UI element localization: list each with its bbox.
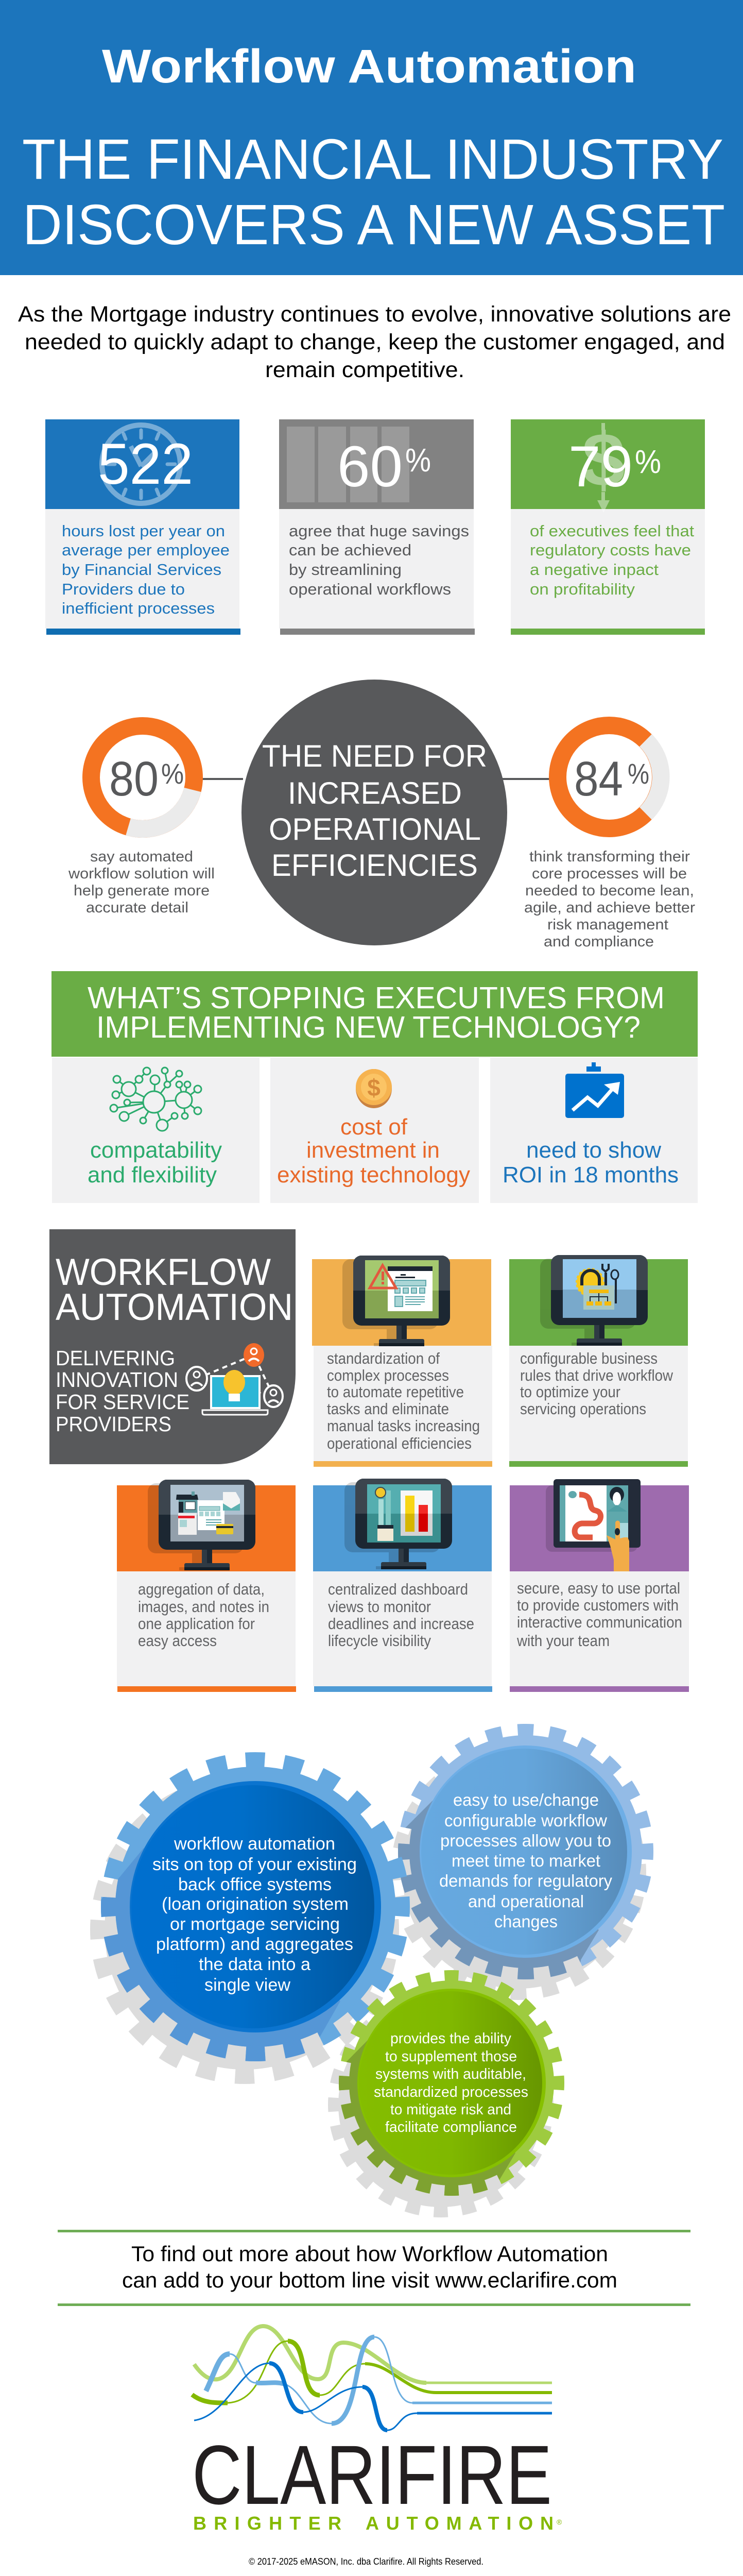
caption: 84%: needed to become lean, (525, 883, 694, 899)
subheading (56, 1346, 189, 1436)
donut chart: 84%: 84 (574, 752, 623, 806)
card: configurable business rules (509, 1255, 688, 1467)
description (328, 1580, 474, 1650)
gear: supplement with auditable processes (334, 1976, 559, 2212)
stat card: 60% (279, 419, 475, 635)
header banner (0, 0, 743, 275)
text: demands for regulatory (439, 1871, 612, 1890)
description (520, 1349, 673, 1418)
donut chart: 84%: % (628, 757, 649, 790)
donut chart: 84% (558, 725, 661, 828)
caption: 80%: help generate more (74, 883, 210, 899)
icon: tablet with touching hand (546, 1479, 641, 1571)
description: agree that huge savings (289, 522, 469, 540)
intro paragraph: remain competitive. (265, 358, 464, 382)
label: need to show (526, 1138, 661, 1163)
description: images, and notes in (138, 1598, 269, 1616)
text: the data into a (199, 1955, 310, 1974)
label (277, 1114, 470, 1188)
intro paragraph (18, 302, 731, 382)
caption: 84% (524, 849, 695, 950)
centre circle: the need for increased operational efficiencies: THE NEED FOR (262, 739, 487, 773)
stat card: 79% (511, 418, 705, 635)
caption: 80%: say automated (90, 849, 193, 865)
text: provides the ability (390, 2030, 511, 2047)
text: facilitate compliance (385, 2119, 517, 2136)
centre circle: the need for increased operational efficiencies: EFFICIENCIES (271, 848, 478, 883)
subheading: DELIVERING (56, 1346, 175, 1370)
description: interactive communication (517, 1613, 682, 1631)
logo: tagline: ® (557, 2518, 562, 2526)
description (516, 1579, 682, 1650)
text: configurable workflow (444, 1811, 607, 1830)
caption: 80%: workflow solution will (68, 866, 215, 882)
icon: monitor with tools and org chart (540, 1255, 648, 1346)
description: deadlines and increase (328, 1615, 474, 1633)
subtitle: DISCOVERS A NEW ASSET (23, 193, 725, 257)
copyright: © 2017-2025 eMASON, Inc. dba Clarifire. All Rights Reserved. (249, 2556, 483, 2567)
green banner heading: IMPLEMENTING NEW TECHNOLOGY? (96, 1010, 641, 1044)
description: to automate repetitive (327, 1383, 464, 1401)
card: aggregation of data (117, 1480, 296, 1692)
description: secure, easy to use portal (517, 1579, 680, 1597)
heading (56, 1251, 293, 1328)
description: on profitability (530, 580, 635, 598)
panel: need to show ROI (490, 1058, 698, 1203)
label: existing technology (277, 1162, 470, 1188)
number (568, 434, 661, 499)
text: standardized processes (374, 2084, 528, 2100)
label: investment in (306, 1138, 440, 1163)
description: by Financial Services (62, 561, 221, 579)
caption: 84%: risk management (547, 917, 668, 933)
subheading: PROVIDERS (56, 1412, 171, 1436)
icon: monitor with warning and document (342, 1256, 450, 1346)
subheading: FOR SERVICE (56, 1390, 189, 1414)
text: and operational (468, 1892, 584, 1911)
description: operational workflows (289, 580, 451, 598)
icon: monitor with dashboard (344, 1479, 452, 1569)
description: with your team (516, 1632, 610, 1650)
description: inefficient processes (62, 599, 215, 617)
subheading: INNOVATION (56, 1368, 178, 1392)
icon: columns (287, 427, 409, 502)
icon: coin: $ (367, 1074, 381, 1101)
description: a negative inpact (530, 561, 659, 579)
card: standardization (312, 1256, 492, 1467)
number: % (405, 442, 431, 479)
label: and flexibility (88, 1162, 217, 1188)
icon: laptop with bulb and people (186, 1343, 283, 1415)
text: workflow automation (174, 1834, 335, 1854)
icon: clock (102, 425, 180, 503)
description: one application for (138, 1615, 255, 1633)
intro paragraph: needed to quickly adapt to change, keep the customer engaged, and (25, 330, 725, 354)
connectors between donuts and centre circle (202, 778, 550, 780)
number: 79 (568, 434, 633, 499)
text: or mortgage servicing (170, 1914, 340, 1934)
centre circle: the need for increased operational efficiencies: INCREASED (288, 776, 462, 810)
text: single view (204, 1975, 290, 1995)
number: 60 (337, 434, 403, 499)
icon: monitor with documents (148, 1480, 255, 1570)
heading: WORKFLOW (56, 1251, 271, 1293)
logo: clarifire waves (192, 2326, 552, 2430)
number (337, 434, 431, 499)
description: standardization of (327, 1349, 440, 1367)
card: centralized dashboard (313, 1479, 492, 1692)
panel: workflow automation delivering innovation (49, 1229, 296, 1464)
caption: 84%: think transforming their (529, 849, 690, 865)
text: sits on top of your existing (152, 1855, 357, 1874)
caption: 80%: accurate detail (86, 900, 188, 916)
stat card: 522 hours (45, 419, 240, 635)
caption: 84%: core processes will be (532, 866, 687, 882)
label (503, 1138, 679, 1188)
icon: clipboard with rising arrow (565, 1062, 624, 1118)
description (327, 1349, 480, 1452)
subtitle: THE FINANCIAL INDUSTRY (22, 128, 723, 191)
text: (loan origination system (162, 1894, 349, 1914)
description: Providers due to (62, 580, 185, 598)
donut chart: 80%: % (161, 757, 184, 790)
text: changes (494, 1912, 558, 1931)
caption: 84%: and compliance (544, 934, 654, 950)
title: Workflow Automation (102, 40, 636, 93)
icon: dollar with falling arrow: $ (582, 418, 625, 502)
label: compatability (90, 1138, 222, 1163)
heading: AUTOMATION (56, 1286, 293, 1328)
subtitle (22, 128, 725, 257)
call to action: can add to your bottom line visit www.eclarifire.com (122, 2268, 617, 2292)
donut chart: 80%: 80 (109, 752, 159, 806)
caption: 84%: agile, and achieve better (524, 900, 695, 916)
description: aggregation of data, (138, 1580, 265, 1598)
description: servicing operations (520, 1400, 646, 1418)
call to action: To find out more about how Workflow Automation (131, 2242, 608, 2266)
description: hours lost per year on (62, 522, 225, 540)
description: complex processes (327, 1366, 449, 1384)
donut chart: 80% (91, 726, 194, 829)
description: easy access (138, 1632, 217, 1650)
logo: clarifire wordmark: CLARIFIRE (192, 2428, 552, 2522)
description: manual tasks increasing (327, 1417, 480, 1435)
icon: coin (356, 1069, 392, 1108)
centre circle: the need for increased operational efficiencies: OPERATIONAL (269, 812, 481, 846)
label (88, 1138, 222, 1188)
description: regulatory costs have (530, 541, 691, 559)
description: views to monitor (328, 1598, 431, 1616)
text: to mitigate risk and (390, 2102, 511, 2118)
text: platform) and aggregates (156, 1935, 353, 1954)
description: lifecycle visibility (328, 1632, 431, 1650)
description: can be achieved (289, 541, 411, 559)
gear: configurable workflow (397, 1730, 647, 1994)
description: of executives feel that (530, 522, 694, 540)
description: to provide customers with (517, 1596, 679, 1614)
description (530, 522, 694, 598)
logo: tagline: BRIGHTER (193, 2513, 341, 2534)
logo: tagline: AUTOMATION (366, 2513, 554, 2534)
description: operational efficiencies (327, 1434, 472, 1452)
description (138, 1580, 269, 1650)
panel: compatability (52, 1058, 260, 1203)
description (62, 522, 230, 617)
icon: network (110, 1067, 201, 1131)
label: ROI in 18 months (503, 1162, 679, 1188)
green banner heading: WHAT’S STOPPING EXECUTIVES FROM (88, 981, 665, 1015)
text: systems with auditable, (375, 2066, 526, 2082)
description (289, 522, 469, 598)
text (439, 1790, 612, 1931)
green banner heading (51, 971, 698, 1057)
logo: tagline (193, 2513, 562, 2534)
text (152, 1834, 357, 1995)
description: tasks and eliminate (327, 1400, 449, 1418)
text (374, 2030, 528, 2136)
label: cost of (340, 1114, 408, 1140)
description: rules that drive workflow (520, 1366, 673, 1384)
gear: workflow automation sits on top (98, 1760, 402, 2076)
intro paragraph: As the Mortgage industry continues to evolve, innovative solutions are (18, 302, 731, 327)
description: average per employee (62, 541, 230, 559)
number: 522 (98, 432, 193, 496)
text: meet time to market (452, 1851, 600, 1870)
text: processes allow you to (440, 1831, 611, 1850)
call to action (58, 2230, 690, 2306)
description: by streamlining (289, 561, 402, 579)
description: centralized dashboard (328, 1580, 468, 1598)
centre circle: the need for increased operational efficiencies (241, 680, 507, 945)
description: to optimize your (520, 1383, 620, 1401)
panel: cost of investment (270, 1058, 479, 1203)
card: secure portal (510, 1479, 689, 1692)
description: configurable business (520, 1349, 658, 1367)
caption: 80% (68, 849, 215, 916)
text: to supplement those (385, 2048, 517, 2065)
text: back office systems (178, 1875, 332, 1894)
text: easy to use/change (453, 1790, 599, 1809)
number: % (635, 443, 661, 480)
